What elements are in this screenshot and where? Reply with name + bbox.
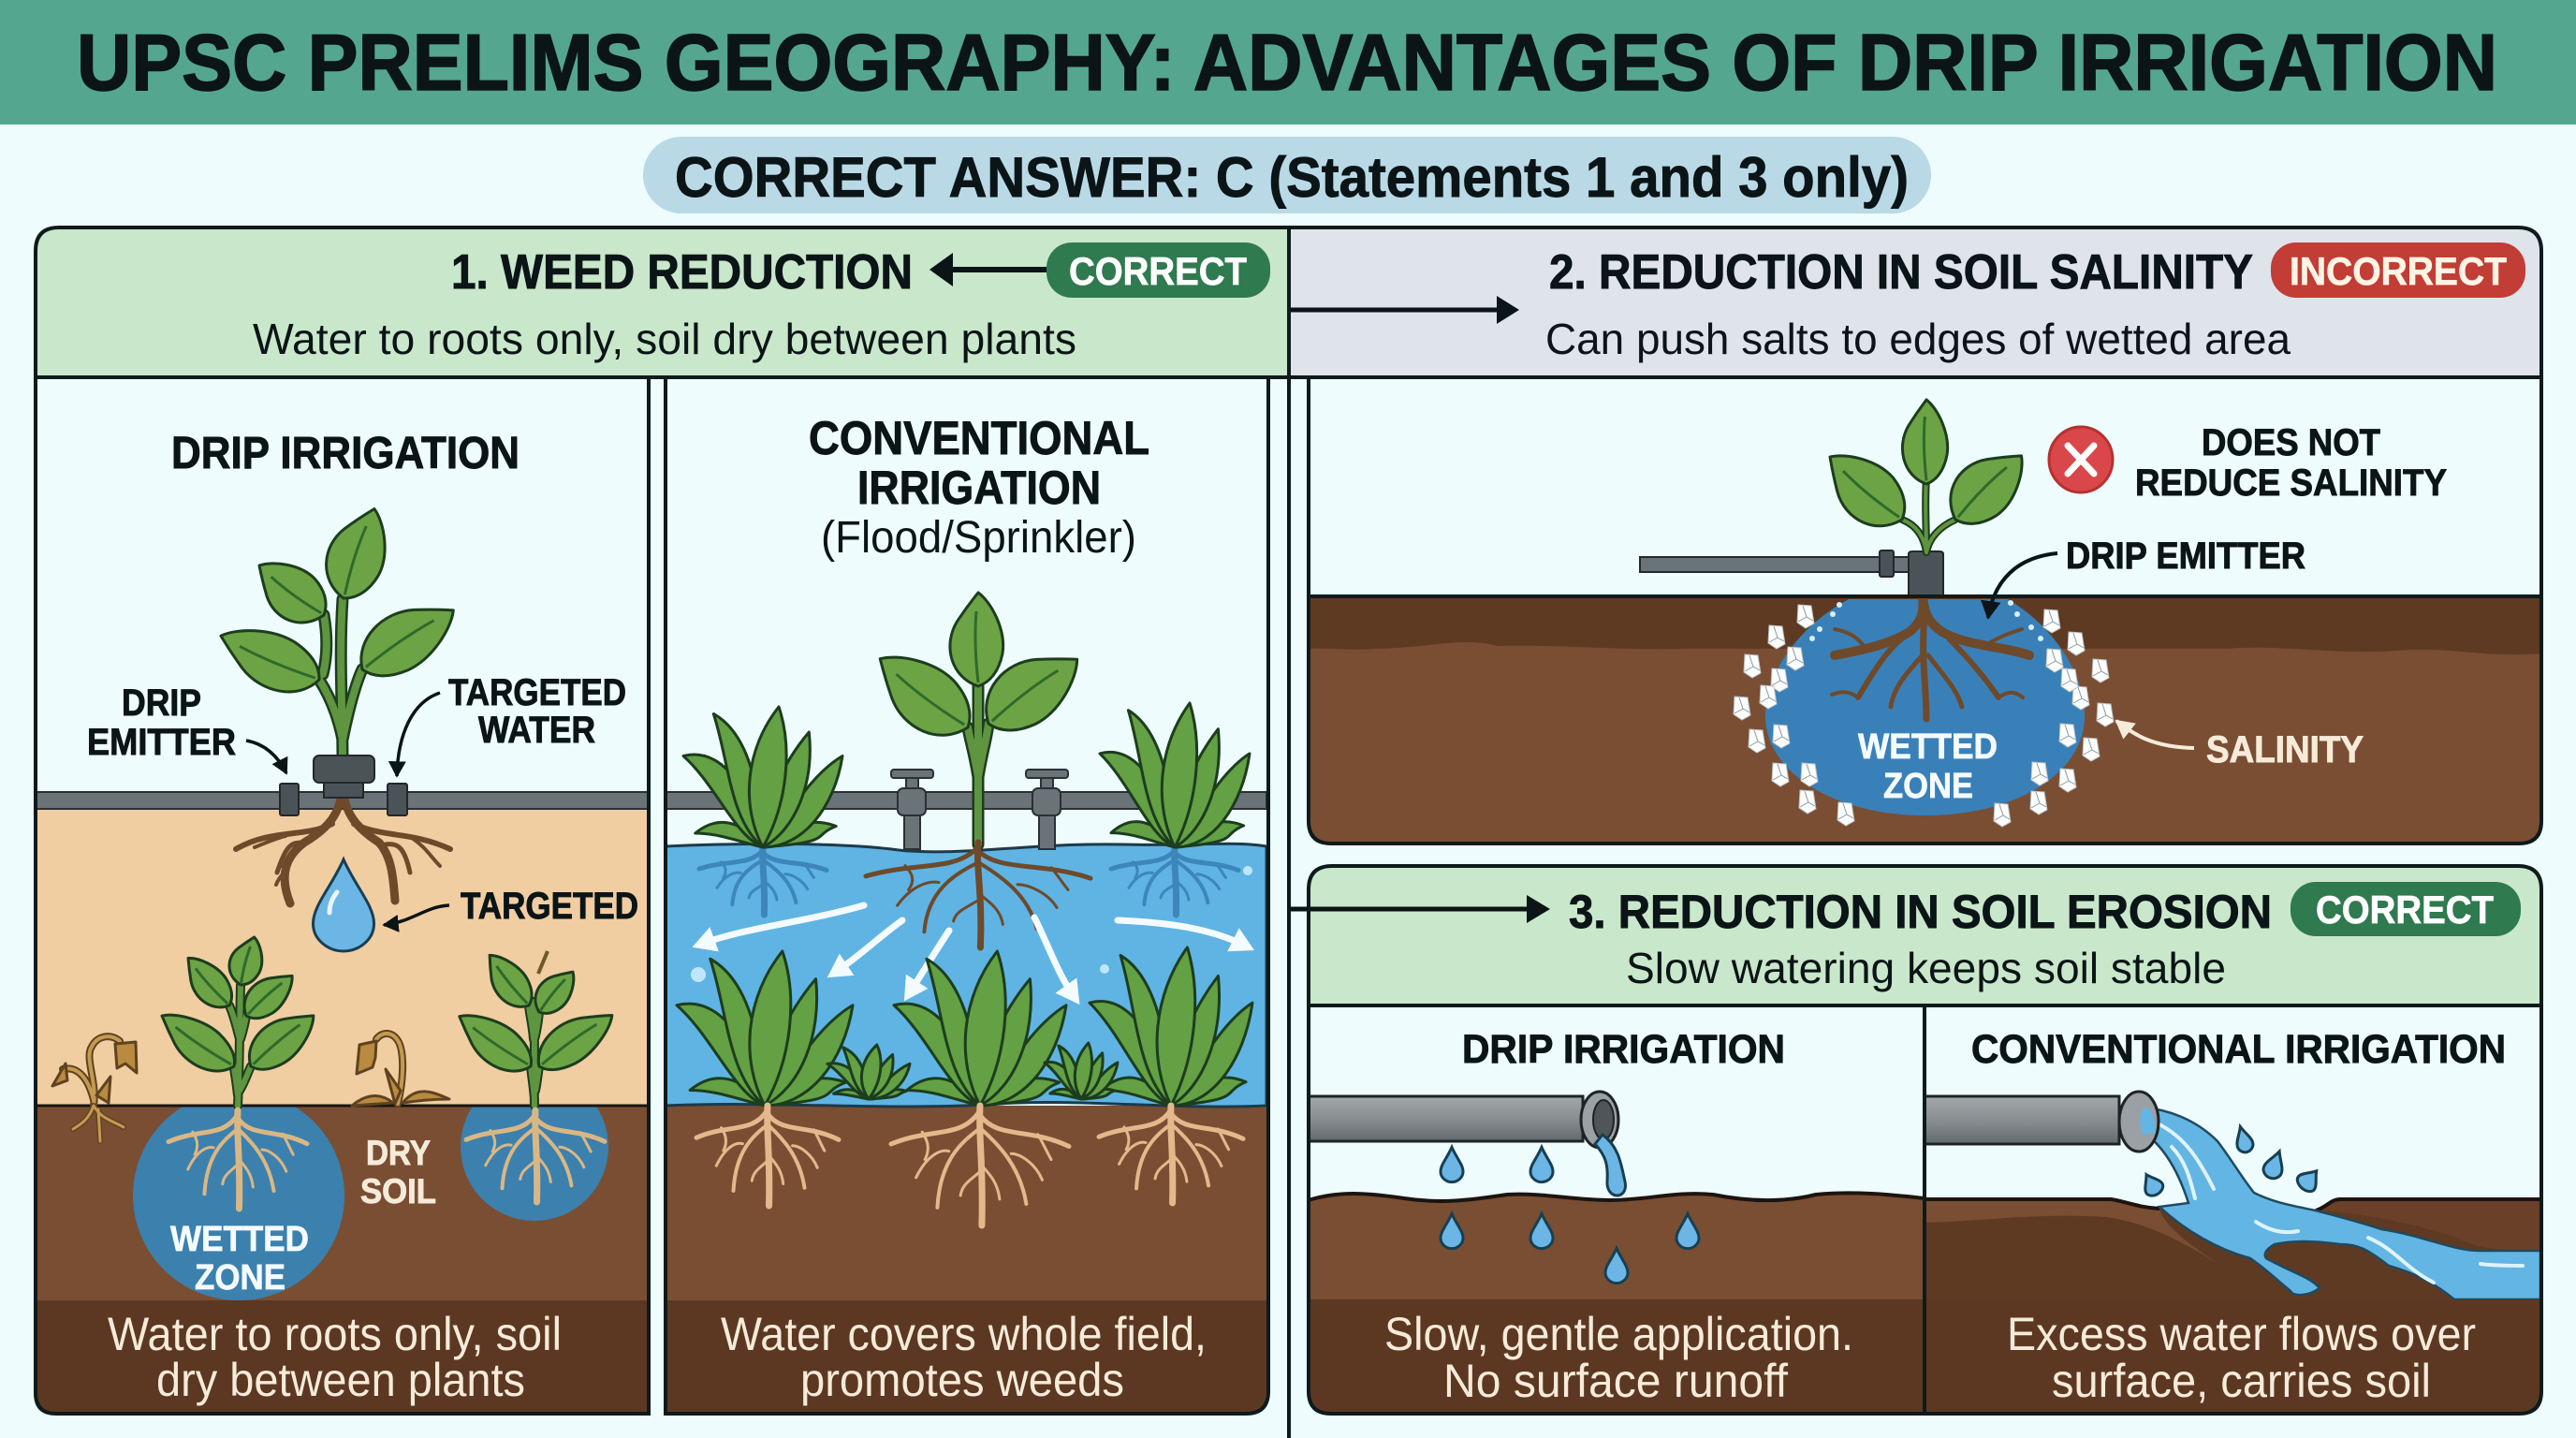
panel 1 header: 1. WEED REDUCTION xyxy=(451,245,913,300)
heading: DRIP IRRIGATION xyxy=(171,429,520,478)
drip column xyxy=(1309,1027,1925,1414)
pipe xyxy=(1925,1092,2159,1152)
label: targeted: TARGETED xyxy=(461,886,638,927)
flow arrows xyxy=(691,866,1252,996)
soil xyxy=(1309,1193,1925,1301)
drip irrigation column xyxy=(36,429,649,1414)
soil profile xyxy=(1309,596,2541,844)
caption: Slow, gentle application. xyxy=(1384,1308,1853,1360)
plant B xyxy=(447,946,622,1106)
label: wetted zone: ZONE xyxy=(195,1258,285,1298)
panel 2 header: INCORRECT xyxy=(2290,249,2507,293)
panel 1 header: Water to roots only, soil dry between plants xyxy=(253,315,1076,363)
label: does not reduce salinity: DOES NOT xyxy=(2202,422,2380,463)
icon: water drop xyxy=(313,859,374,951)
main plant roots xyxy=(236,786,450,903)
title banner xyxy=(0,0,2576,125)
caption: Excess water flows over xyxy=(2007,1308,2476,1360)
label: drip emitter: EMITTER xyxy=(87,722,236,763)
panel 1 header: CORRECT xyxy=(1069,249,1247,293)
caption band xyxy=(666,1300,1266,1414)
correct answer pill: CORRECT ANSWER: C (Statements 1 and 3 only) xyxy=(675,146,1909,209)
drip pipe xyxy=(36,792,649,809)
wilted plant left xyxy=(52,1036,137,1141)
soil layer xyxy=(36,1106,649,1302)
label: drip emitter xyxy=(87,682,286,773)
sand layer xyxy=(36,809,649,1106)
water flow xyxy=(2140,1108,2540,1299)
roots xyxy=(1832,597,2029,719)
label: drip emitter: DRIP EMITTER xyxy=(2066,536,2305,577)
panel 2 header: 2. REDUCTION IN SOIL SALINITY xyxy=(1549,245,2253,300)
panel 3 header: 3. REDUCTION IN SOIL EROSION xyxy=(1569,886,2272,938)
panel 3 header: CORRECT xyxy=(2316,888,2494,932)
pipe with valves xyxy=(666,770,1266,849)
label: does not reduce salinity: REDUCE SALINITY xyxy=(2135,462,2447,504)
label: wetted zone: WETTED xyxy=(1858,727,1998,767)
salt crystals xyxy=(1734,600,2114,827)
wilted plant middle xyxy=(352,1034,449,1106)
water drops xyxy=(1441,1147,1699,1284)
caption xyxy=(721,1308,1207,1406)
panel 2 header: Can push salts to edges of wetted area xyxy=(1545,315,2291,363)
caption band xyxy=(1309,1299,1925,1414)
caption: Water covers whole field, xyxy=(721,1308,1207,1360)
caption xyxy=(108,1308,562,1406)
panel 1 outline xyxy=(36,227,1288,1414)
label: dry soil xyxy=(360,1134,436,1211)
title banner: UPSC PRELIMS GEOGRAPHY: ADVANTAGES OF DRIP IRRIGATION xyxy=(77,19,2497,108)
pipe xyxy=(1309,1092,1625,1196)
main plant xyxy=(210,499,468,758)
label: targeted xyxy=(384,886,638,927)
label: targeted water xyxy=(397,672,626,776)
pipe and emitter xyxy=(1640,550,1943,596)
center crop roots xyxy=(866,843,1090,947)
heading: (Flood/Sprinkler) xyxy=(821,513,1136,563)
label: drip emitter: DRIP xyxy=(122,682,201,724)
caption xyxy=(1384,1308,1853,1407)
conventional irrigation column xyxy=(666,412,1266,1414)
panel: 2 soil salinity xyxy=(1288,227,2541,844)
panel 3 header xyxy=(1289,866,2541,1005)
caption: promotes weeds xyxy=(800,1354,1124,1406)
caption: Water to roots only, soil xyxy=(108,1308,562,1360)
blue weed roots xyxy=(699,847,1238,915)
panel: 1 weed reduction xyxy=(36,227,1288,1414)
label: targeted water: WATER xyxy=(478,710,595,751)
label: salinity xyxy=(2116,721,2364,770)
eroded soil xyxy=(1925,1199,2541,1301)
weeds in water xyxy=(677,947,1252,1106)
label: targeted water: TARGETED xyxy=(448,672,626,713)
heading: CONVENTIONAL IRRIGATION xyxy=(1971,1027,2506,1072)
panel: 3 soil erosion xyxy=(1289,866,2541,1414)
wetted zone right xyxy=(461,1073,608,1221)
plant A xyxy=(150,932,325,1106)
caption band xyxy=(36,1300,649,1414)
weeds above water xyxy=(683,703,1250,847)
heading: IRRIGATION xyxy=(857,462,1101,514)
caption xyxy=(2007,1308,2476,1407)
splashes xyxy=(2138,1124,2324,1198)
panel 3 outline xyxy=(1309,866,2541,1414)
label: dry soil: SOIL xyxy=(360,1172,436,1211)
panel 3 header: Slow watering keeps soil stable xyxy=(1626,944,2226,992)
plant A roots xyxy=(168,1110,307,1209)
heading xyxy=(809,412,1149,563)
caption: No surface runoff xyxy=(1443,1355,1788,1407)
emitter hardware xyxy=(280,756,407,815)
label: wetted zone: WETTED xyxy=(170,1220,309,1259)
label: does not reduce salinity xyxy=(2135,422,2447,504)
panel 2 header xyxy=(1288,227,2541,377)
plant B roots xyxy=(466,1110,605,1202)
soil layer xyxy=(666,1106,1266,1302)
label: drip emitter xyxy=(1988,536,2305,618)
label: wetted zone xyxy=(170,1220,309,1298)
label: wetted zone: ZONE xyxy=(1883,767,1973,806)
label: salinity: SALINITY xyxy=(2206,729,2364,770)
tan weed roots xyxy=(696,1106,1243,1225)
caption: surface, carries soil xyxy=(2052,1355,2431,1407)
label: dry soil: DRY xyxy=(366,1134,431,1172)
heading: DRIP IRRIGATION xyxy=(1462,1027,1785,1072)
flood water xyxy=(666,844,1266,1107)
panel 2 outline xyxy=(1288,227,2541,844)
conventional column xyxy=(1925,1027,2541,1414)
plant xyxy=(1810,400,2040,552)
center crop plant xyxy=(860,593,1094,844)
panel 1 header xyxy=(36,227,1288,377)
wetted zone xyxy=(1765,599,2085,815)
label: wetted zone xyxy=(1858,727,1998,806)
icon: red X xyxy=(2049,427,2113,492)
wetted zone left xyxy=(133,1091,344,1300)
caption band xyxy=(1925,1299,2541,1414)
caption: dry between plants xyxy=(156,1354,525,1406)
heading: CONVENTIONAL xyxy=(809,412,1149,464)
central divider xyxy=(1287,226,1291,1438)
